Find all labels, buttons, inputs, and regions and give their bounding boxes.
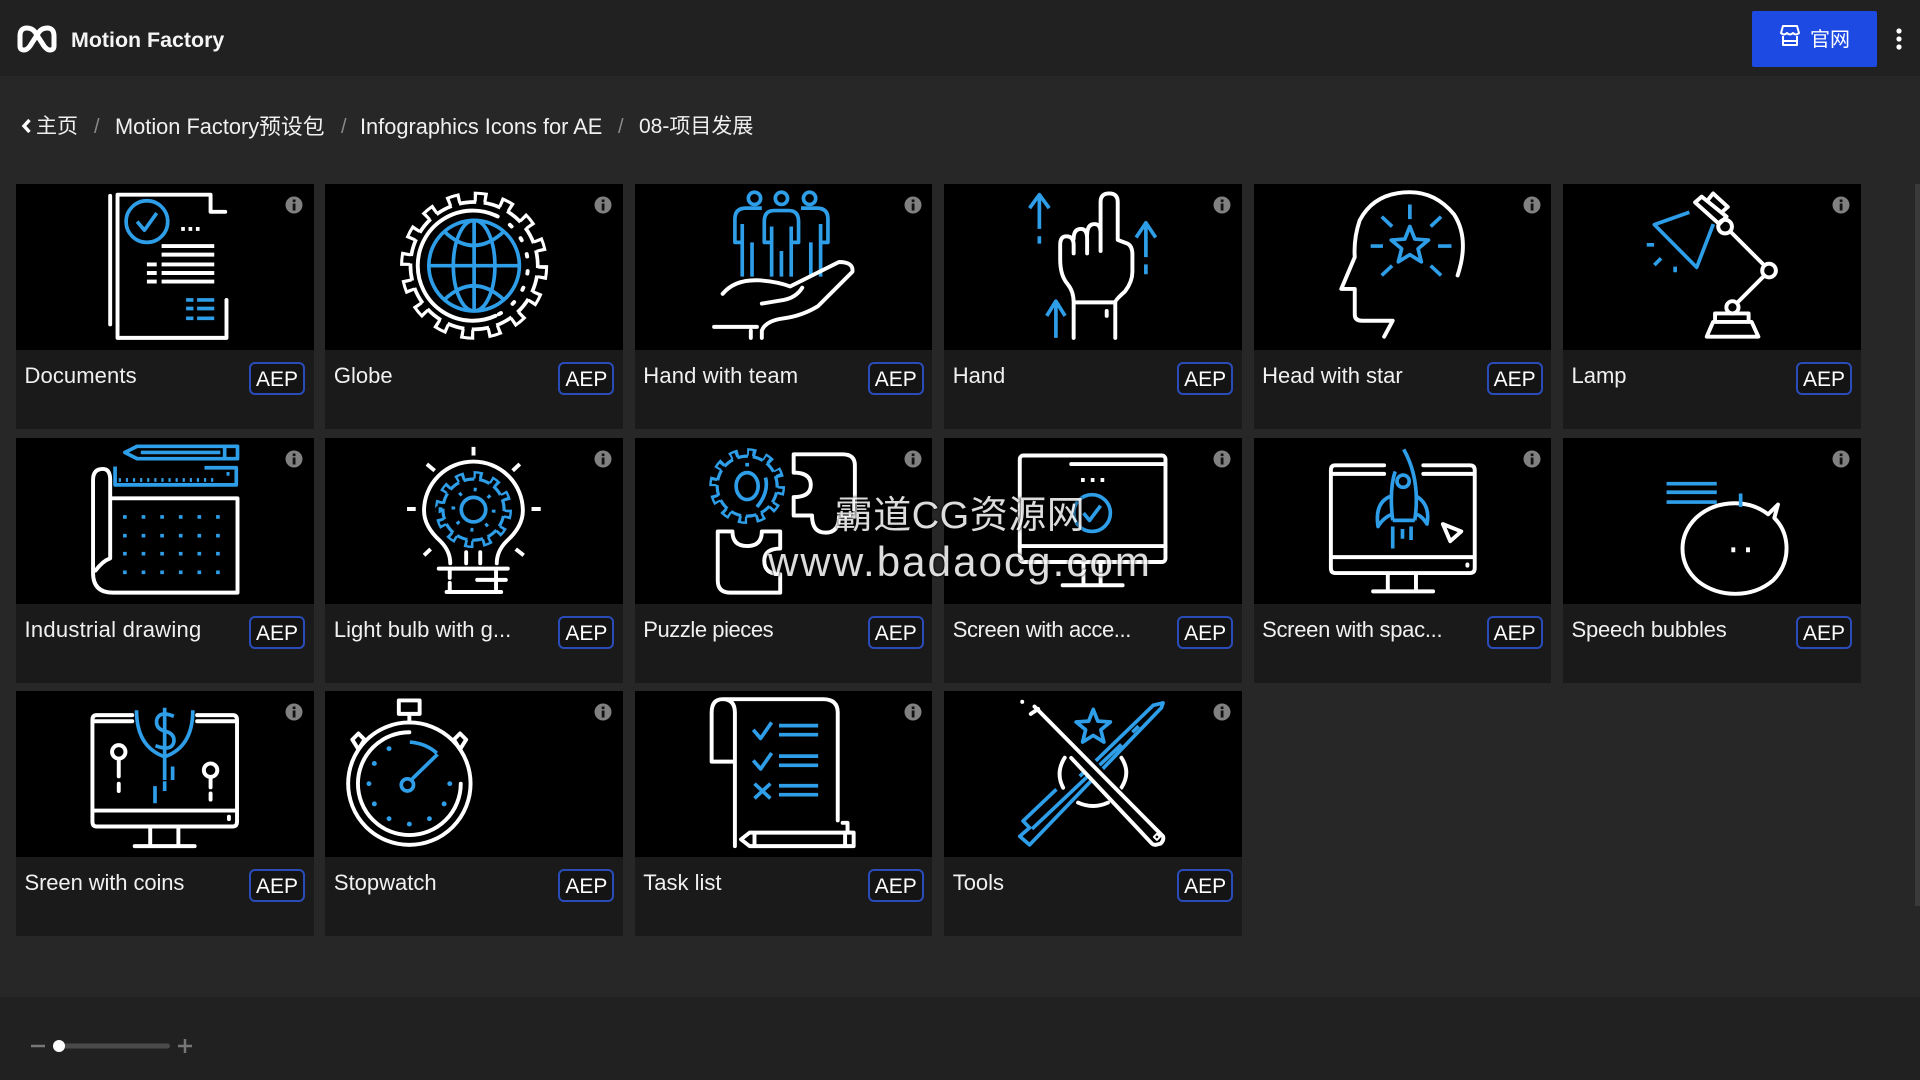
icon: documents	[16, 184, 314, 350]
card title: Sreen with coins	[24, 870, 184, 895]
icon: screen with check	[944, 438, 1242, 604]
card: Puzzle pieces	[635, 438, 932, 683]
card: Light bulb with gear	[325, 438, 623, 683]
format badge: AEP	[256, 368, 298, 391]
format badge	[1796, 616, 1852, 649]
card: Screen with spaceship	[1254, 438, 1551, 683]
icon: globe in gear	[325, 184, 623, 350]
card title: Industrial drawing	[24, 617, 201, 642]
format badge	[249, 616, 305, 649]
format badge: AEP	[565, 368, 607, 391]
format badge: AEP	[565, 622, 607, 645]
icon: speech bubble	[1563, 438, 1860, 604]
info icon	[1214, 704, 1230, 720]
info icon	[904, 704, 922, 720]
card title: Hand	[953, 363, 1005, 388]
card title: Stopwatch	[334, 870, 437, 895]
card: Tools	[944, 691, 1242, 936]
card: Screen with access	[944, 438, 1242, 683]
breadcrumb: current page: 08-项目发展	[639, 115, 753, 138]
icon: stopwatch	[325, 691, 623, 857]
card: Lamp	[1563, 184, 1860, 429]
scrollbar	[1915, 184, 1920, 906]
icon: hand with arrows	[944, 184, 1242, 350]
icon: hand with team	[635, 184, 932, 350]
format badge	[1487, 616, 1543, 649]
card title: Tools	[953, 870, 1004, 895]
format badge	[1177, 869, 1233, 902]
info icon	[1524, 450, 1540, 468]
info icon	[1832, 450, 1850, 468]
breadcrumb	[22, 114, 753, 139]
format badge: AEP	[256, 622, 298, 645]
top header bar	[0, 0, 1920, 76]
icon: desk lamp	[1563, 184, 1860, 350]
card: Hand with team	[635, 184, 932, 429]
format badge	[868, 362, 924, 395]
brand name: Motion Factory	[71, 28, 224, 52]
zoom slider	[31, 1039, 192, 1053]
icon: back chevron	[22, 118, 31, 134]
icon: screen with rocket	[1254, 438, 1551, 604]
format badge: AEP	[1494, 368, 1536, 391]
format badge	[1177, 362, 1233, 395]
card title: Screen with acce...	[953, 617, 1131, 642]
card title: Hand with team	[643, 363, 798, 388]
info icon	[594, 450, 612, 468]
card: Industrial drawing	[16, 438, 314, 683]
format badge: AEP	[875, 622, 917, 645]
info icon	[286, 196, 302, 214]
format badge: AEP	[256, 875, 298, 898]
format badge	[558, 616, 614, 649]
icon: screen with coins	[16, 691, 314, 857]
info icon	[1832, 196, 1850, 214]
icon: crossed tools	[944, 691, 1242, 857]
icon: industrial drawing	[16, 438, 314, 604]
format badge: AEP	[1803, 622, 1845, 645]
icon: Motion Factory logo	[18, 26, 56, 52]
card title: Puzzle pieces	[643, 617, 773, 642]
card: Head with star	[1254, 184, 1551, 429]
format badge: AEP	[1803, 368, 1845, 391]
format badge	[868, 616, 924, 649]
format badge: AEP	[1494, 622, 1536, 645]
separator: /	[94, 116, 100, 138]
card: Globe	[325, 184, 623, 429]
icon: puzzle pieces	[635, 438, 932, 604]
icon: more menu	[1896, 28, 1902, 50]
format badge: AEP	[875, 368, 917, 391]
card: Task list	[635, 691, 932, 936]
card: Documents	[16, 184, 314, 429]
format badge	[1487, 362, 1543, 395]
watermark line 2: www.badaocg.com	[768, 538, 1152, 585]
icon: light bulb with gear	[325, 438, 623, 604]
card title: Documents	[24, 363, 137, 388]
watermark	[766, 494, 1152, 585]
watermark line 1: 霸道CG资源网	[835, 495, 1085, 537]
format badge: AEP	[565, 875, 607, 898]
format badge	[249, 869, 305, 902]
info icon	[904, 196, 922, 214]
info icon	[286, 704, 302, 720]
format badge: AEP	[1184, 622, 1226, 645]
card title: Globe	[334, 363, 393, 388]
format badge	[1796, 362, 1852, 395]
info icon	[594, 704, 612, 720]
format badge	[558, 869, 614, 902]
official site button	[1752, 11, 1877, 67]
breadcrumb: preset pack: Motion Factory预设包	[115, 114, 325, 139]
card: Screen with coins	[16, 691, 314, 936]
card title: Speech bubbles	[1572, 617, 1726, 642]
card title: Task list	[643, 870, 722, 895]
format badge	[558, 362, 614, 395]
card: Speech bubbles	[1563, 438, 1860, 683]
info icon	[594, 196, 612, 214]
card title: Lamp	[1572, 363, 1627, 388]
info icon	[1524, 196, 1540, 214]
card title: Light bulb with g...	[334, 617, 511, 642]
separator: /	[341, 116, 347, 138]
breadcrumb: infographics: Infographics Icons for AE	[360, 114, 602, 139]
format badge: AEP	[1184, 368, 1226, 391]
card title: Screen with spac...	[1262, 617, 1442, 642]
format badge	[1177, 616, 1233, 649]
card: Stopwatch	[325, 691, 623, 936]
icon: task list	[635, 691, 932, 857]
format badge: AEP	[875, 875, 917, 898]
format badge	[868, 869, 924, 902]
breadcrumb: home: 主页	[36, 115, 78, 138]
info icon	[904, 450, 922, 468]
info icon	[1214, 196, 1230, 214]
card title: Head with star	[1262, 363, 1403, 388]
info icon	[286, 450, 302, 468]
icon: head with star	[1254, 184, 1551, 350]
footer bar	[0, 997, 1920, 1080]
format badge	[249, 362, 305, 395]
icon: store	[1780, 25, 1800, 46]
info icon	[1214, 450, 1230, 468]
format badge: AEP	[1184, 875, 1226, 898]
card: Hand	[944, 184, 1242, 429]
separator: /	[618, 116, 624, 138]
button label: 官网	[1810, 29, 1850, 51]
